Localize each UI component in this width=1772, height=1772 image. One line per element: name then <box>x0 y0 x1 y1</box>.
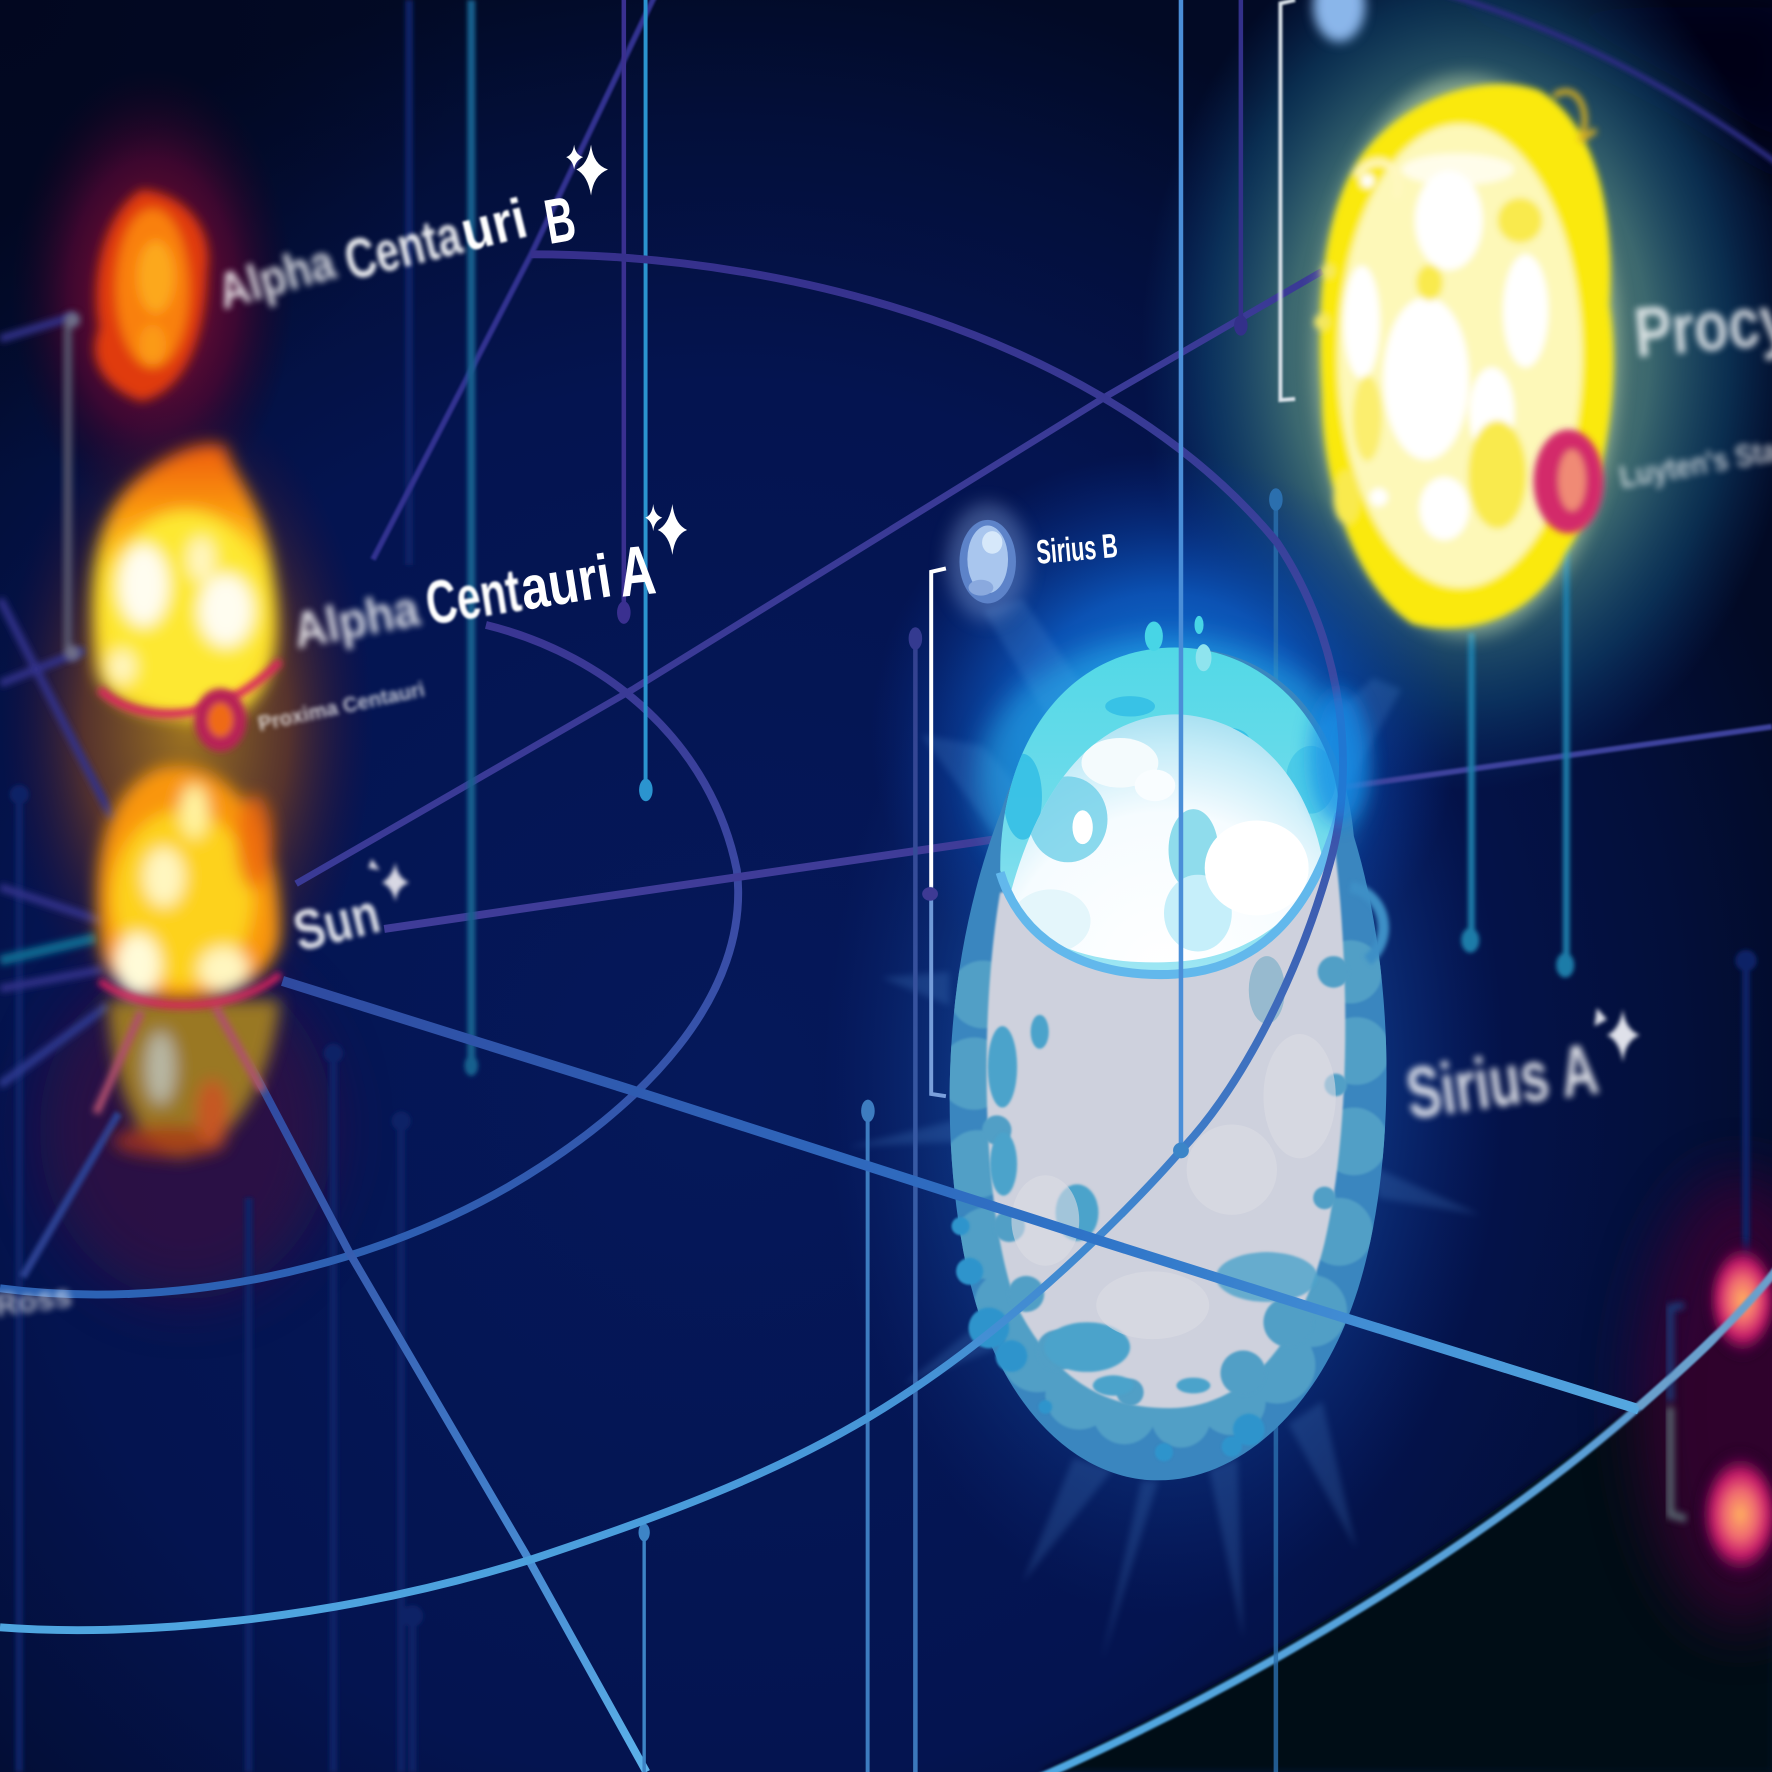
label: Alpha Centauri B: uri <box>454 186 533 263</box>
label: Alpha Centauri B <box>211 184 581 320</box>
pin: Procyon pair <box>1461 542 1574 978</box>
pin: bottom <box>639 1523 650 1772</box>
star: top blue <box>1313 0 1365 42</box>
rim blobs <box>952 1217 1265 1461</box>
crater blobs <box>988 1015 1318 1396</box>
pin: lower centre <box>909 627 922 1772</box>
star: Sirius A <box>938 616 1401 1492</box>
star: Sirius B <box>947 503 1028 620</box>
bracket: lower right <box>1670 1305 1686 1519</box>
lumpy inner band <box>938 940 1390 1448</box>
star: Proxima Centauri <box>194 688 246 752</box>
luminous cap <box>1000 648 1338 970</box>
glow: Alpha Centauri A and Sun <box>0 396 373 1051</box>
glow: Sun lower <box>40 961 333 1300</box>
outer orbit ring <box>1034 0 1772 1772</box>
companion: Luyten's Star <box>1534 429 1604 533</box>
glow: Procyon <box>1141 0 1772 791</box>
glow over ring at cap corner <box>1310 689 1369 825</box>
label: Alpha Centauri A <box>289 530 659 659</box>
crescent rim <box>99 974 280 1005</box>
core <box>987 836 1345 1408</box>
pin: Alpha Centauri A <box>639 0 653 801</box>
label: Alpha Centauri A: Cent <box>421 556 525 638</box>
star: Procyon <box>1314 76 1618 636</box>
label: Alpha Centauri A: Alpha <box>289 580 424 659</box>
icon: sparkles B <box>566 145 608 196</box>
label: Alpha Centauri B: Centa <box>338 202 468 292</box>
crescent rim <box>99 661 280 714</box>
pin: behind Sirius <box>1269 488 1283 1772</box>
label: Alpha Centauri A: A <box>615 530 659 612</box>
bracket: Procyon <box>1280 0 1295 400</box>
label: Proxima Centauri: Proxima Centauri <box>256 677 427 736</box>
outer halo <box>978 639 1362 921</box>
pin: purple right <box>1234 0 1248 336</box>
label: Alpha Centauri A: auri <box>516 541 616 623</box>
cap droplets <box>1145 616 1211 671</box>
star: Alpha Centauri B <box>95 190 208 401</box>
star: red dwarf lower <box>1695 1447 1772 1582</box>
orbit ring over Sirius <box>0 254 1343 1630</box>
bracket: Alpha Centauri <box>64 312 80 661</box>
icon: sparkles Sun <box>368 859 409 902</box>
label: Sirius B: Sirius B <box>1035 527 1119 572</box>
pin: lower left of Sirius <box>861 1100 875 1772</box>
pin: Sirius A <box>1173 0 1189 1158</box>
star: Alpha Centauri A <box>92 444 280 719</box>
star: red dwarf upper <box>1703 1237 1772 1362</box>
glow: Sirius A <box>825 452 1503 1661</box>
star: Sun <box>96 766 280 1158</box>
inner orbit ring <box>0 625 738 1295</box>
label: Alpha Centauri B: Alpha <box>211 234 341 320</box>
ring over red dwarf <box>1639 1266 1772 1407</box>
pin: deep teal <box>464 0 478 1076</box>
lower half reflection <box>107 1000 280 1158</box>
icon: sparkles A <box>645 504 687 555</box>
label: Alpha Centauri B: B <box>540 184 581 258</box>
glow: red dwarfs <box>1639 1175 1772 1627</box>
icon: sparkles Sirius <box>1595 1008 1640 1062</box>
label: Sirius A: Sirius A <box>1401 1029 1603 1135</box>
lumps biting into core <box>982 956 1349 1406</box>
bracket: Sirius <box>922 568 946 1096</box>
glow: Alpha Centauri B <box>11 68 294 520</box>
label: Sun: Sun <box>287 881 386 963</box>
cap edge <box>1000 814 1339 975</box>
spoke over Sirius <box>283 981 1639 1409</box>
pin: purple <box>617 0 631 624</box>
